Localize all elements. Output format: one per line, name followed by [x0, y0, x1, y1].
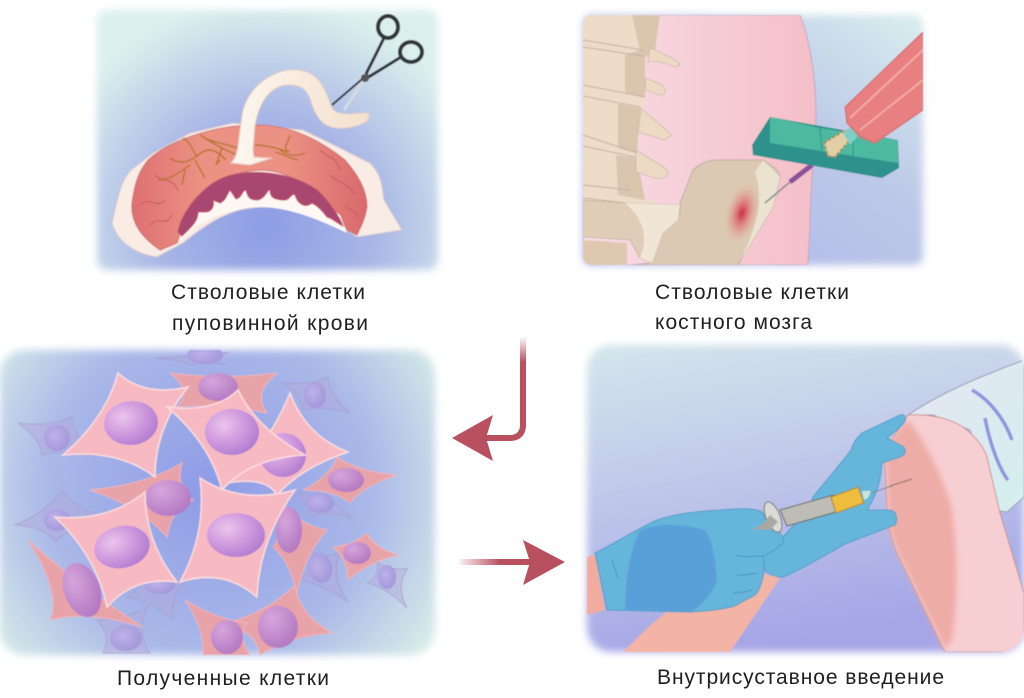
caption: bone marrow stem cells: костного мозга: [655, 311, 812, 334]
panel: bone marrow: [583, 15, 923, 265]
sleeve folds: [972, 390, 1012, 480]
right glove: [763, 415, 905, 577]
middle salmon cells: [28, 373, 398, 655]
panel: intra-articular injection: [587, 345, 1024, 652]
ilium bone: [630, 160, 780, 265]
left glove: [595, 509, 784, 612]
placenta: [132, 125, 367, 250]
injection mark: [890, 479, 912, 486]
disc lines: [583, 40, 645, 203]
caption: cord blood stem cells: пуповинной крови: [172, 312, 368, 335]
illustration content: [583, 15, 923, 265]
arrow: right: [460, 540, 565, 585]
cell cluster: [15, 346, 408, 655]
pedicle shading: [616, 15, 660, 200]
caption: intra-articular injection: Внутрисуставное введение: [657, 666, 944, 689]
caption: bone marrow stem cells: [655, 281, 849, 334]
caption: obtained cells: Полученные клетки: [117, 667, 329, 690]
spine: [583, 15, 680, 205]
panel background: [0, 350, 435, 655]
body skin: [583, 15, 816, 265]
green T handle: [752, 117, 899, 178]
vertebral column base: [583, 15, 660, 205]
faint background cells: [15, 346, 408, 653]
left glove shading: [625, 525, 717, 612]
caption: bone marrow stem cells: Стволовые клетки: [655, 281, 849, 304]
umbilical cord: [231, 70, 369, 165]
marrow red spot: [727, 188, 757, 238]
maternal lobes: [178, 172, 343, 236]
scissors: [332, 16, 422, 110]
caption: cord blood stem cells: [171, 281, 368, 335]
ilium highlight: [740, 160, 780, 262]
leg skin: [885, 415, 1024, 652]
arrow: down then left: [452, 336, 526, 461]
needle: [790, 165, 812, 182]
illustration content: [587, 360, 1024, 652]
spinous processes: [636, 48, 680, 178]
panel background: [583, 15, 923, 265]
red syringe: [845, 32, 923, 143]
caption: cord blood stem cells: Стволовые клетки: [171, 281, 365, 304]
sleeve: [908, 360, 1024, 512]
placental membrane: [112, 123, 402, 257]
inner white crescent: [180, 180, 347, 242]
surface veins on lobes: [140, 150, 358, 225]
leg shading: [886, 420, 956, 650]
threaded connector: [824, 130, 852, 157]
forearm left: [587, 555, 605, 615]
forearm lower: [623, 573, 780, 652]
left glove finger creases: [612, 555, 763, 593]
panel background: [97, 10, 438, 270]
panel background: [587, 345, 1024, 652]
blood vessels: [158, 135, 305, 185]
panel: obtained cells: [0, 346, 435, 655]
panel: umbilical cord blood: [97, 10, 438, 270]
sacrum: [583, 200, 680, 263]
front pink cells: [55, 373, 348, 607]
syringe: [750, 486, 892, 534]
